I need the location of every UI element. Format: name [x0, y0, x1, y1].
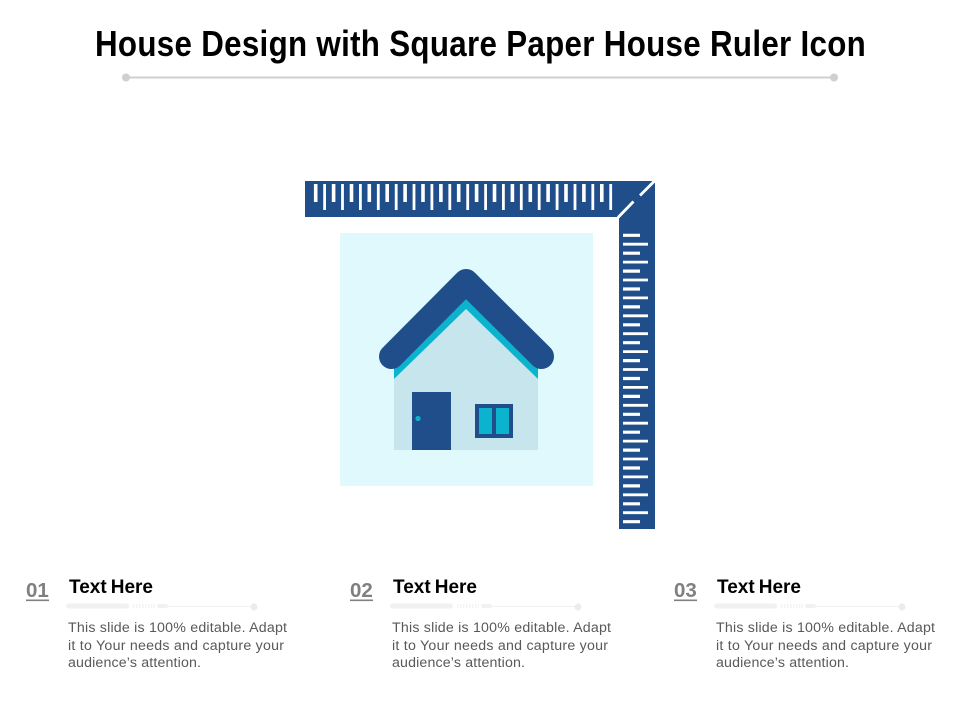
number 02: 02	[350, 579, 373, 602]
panel: light blue square	[340, 233, 593, 486]
heading: Text Here	[393, 577, 477, 598]
text block 01	[26, 577, 287, 671]
body text: audience’s attention.	[716, 655, 849, 671]
body text: it to Your needs and capture your	[68, 638, 284, 654]
body text: it to Your needs and capture your	[392, 638, 608, 654]
body text: audience’s attention.	[68, 655, 201, 671]
body text: This slide is 100% editable. Adapt	[392, 620, 611, 636]
divider	[66, 604, 258, 610]
body text: audience’s attention.	[392, 655, 525, 671]
number 03: 03	[674, 579, 697, 602]
body text: This slide is 100% editable. Adapt	[716, 620, 935, 636]
number 01: 01	[26, 579, 49, 602]
text block 02	[350, 577, 611, 671]
window	[475, 404, 513, 438]
icon: square ruler	[305, 180, 655, 529]
body text: it to Your needs and capture your	[716, 638, 932, 654]
teal roof lining	[394, 296, 538, 379]
text block 03	[674, 577, 935, 671]
heading: Text Here	[69, 577, 153, 598]
divider	[390, 604, 582, 610]
icon: house	[392, 282, 542, 450]
title: House Design with Square Paper House Ruler Icon	[95, 24, 866, 65]
title rule	[122, 74, 838, 82]
door	[412, 392, 451, 450]
house body	[394, 309, 538, 450]
body text: This slide is 100% editable. Adapt	[68, 620, 287, 636]
heading: Text Here	[717, 577, 801, 598]
divider	[714, 604, 906, 610]
roof	[392, 282, 542, 356]
